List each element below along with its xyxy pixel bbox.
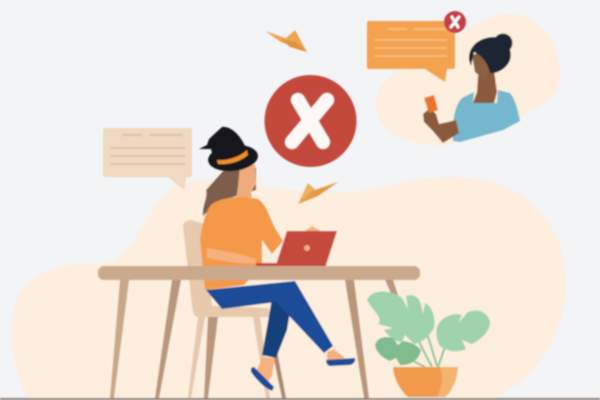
front leg <box>206 281 333 353</box>
face <box>472 50 491 80</box>
laptop logo <box>304 245 310 251</box>
arm holding phone <box>423 108 459 143</box>
right leaf <box>436 310 490 351</box>
hair bun <box>494 34 512 52</box>
second woman <box>423 34 520 143</box>
back leg <box>262 298 290 358</box>
hair <box>469 37 511 73</box>
shoe right <box>326 358 355 366</box>
sweater <box>200 197 283 290</box>
left speech bubble <box>103 128 192 190</box>
potted plant <box>367 292 490 397</box>
orange speech bubble <box>367 21 455 82</box>
shoe left <box>251 367 274 391</box>
second person blob <box>376 14 560 145</box>
forearm <box>207 248 256 264</box>
phone <box>424 95 438 113</box>
table <box>98 266 420 398</box>
laptop base <box>256 263 326 266</box>
large leaf <box>367 292 435 344</box>
hair <box>203 168 256 216</box>
dark leaf <box>375 337 421 365</box>
pot <box>393 367 458 397</box>
blue shirt <box>453 90 520 142</box>
red cross icon <box>264 75 356 167</box>
neck and chest <box>473 70 497 103</box>
witch hat <box>199 127 259 174</box>
face and neck <box>236 164 256 200</box>
ankle left <box>257 357 275 385</box>
floor line <box>0 398 600 400</box>
chair <box>183 220 286 398</box>
ankle right <box>327 349 345 362</box>
paper plane top <box>265 30 307 52</box>
background blob <box>12 177 565 398</box>
hand <box>305 226 321 231</box>
woman at desk <box>199 127 355 391</box>
laptop <box>276 231 337 265</box>
paper plane bottom <box>298 182 338 204</box>
small red cross badge <box>444 11 466 33</box>
stems <box>395 320 449 367</box>
